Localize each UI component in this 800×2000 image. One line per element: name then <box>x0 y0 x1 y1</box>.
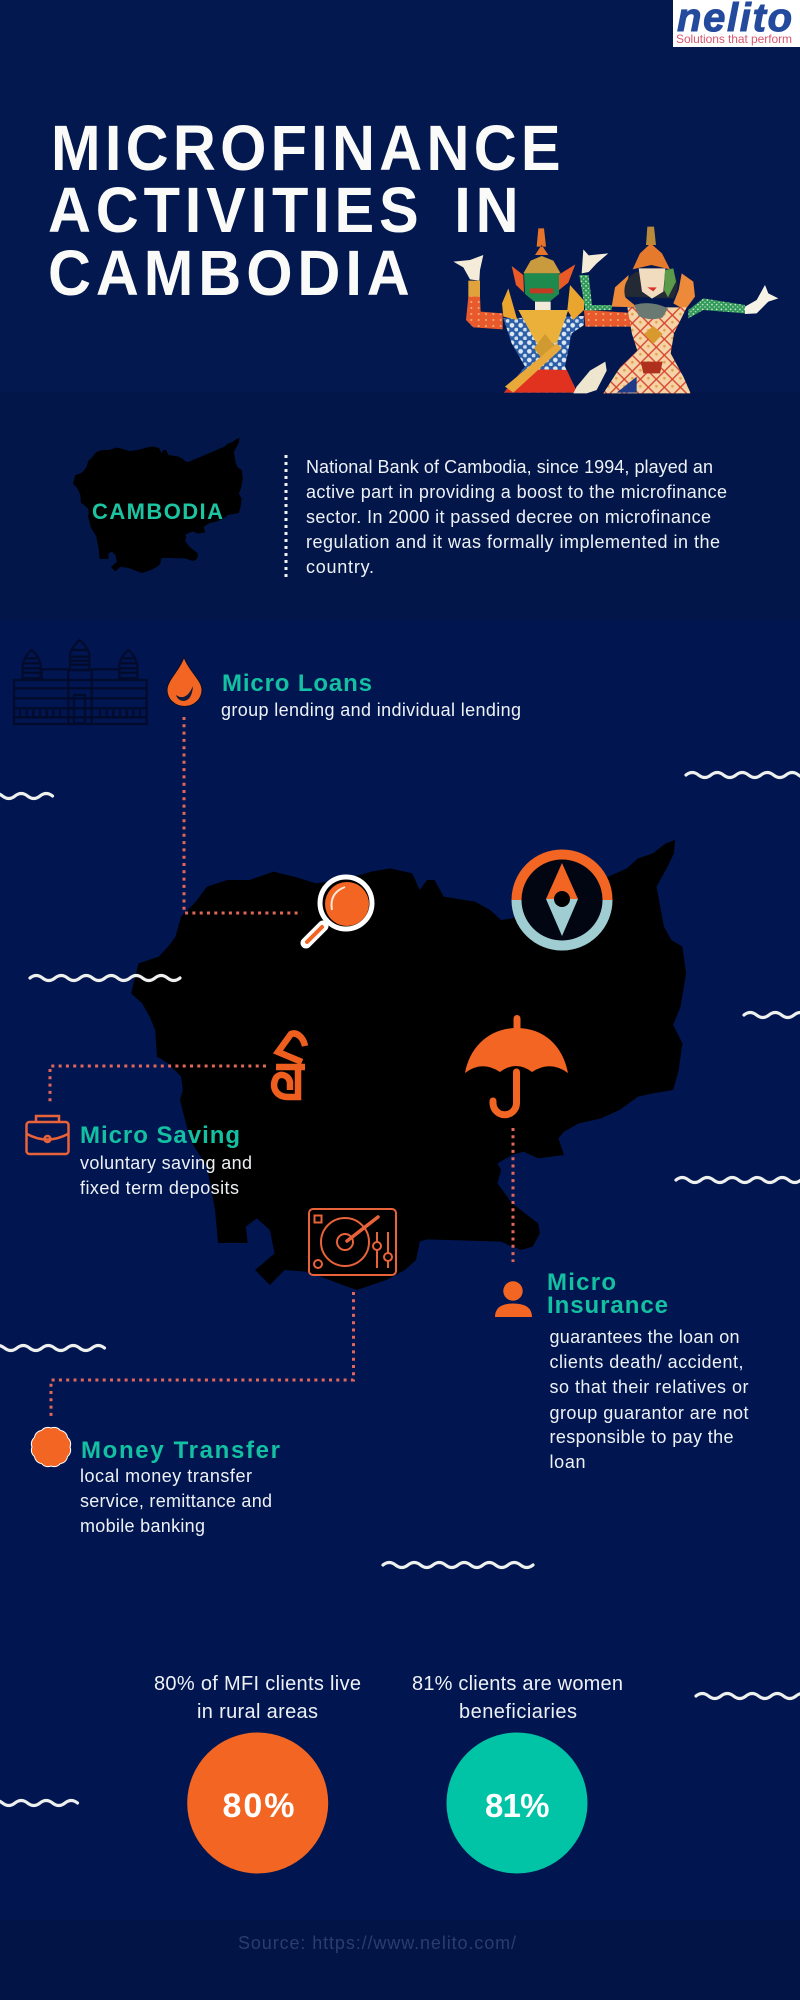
icon: riel symbol <box>274 1034 305 1097</box>
Micro Loans text: group lending and individual lending <box>221 700 521 720</box>
Micro Insurance text: guarantees the loan on <box>550 1327 740 1347</box>
icon: compass <box>516 854 608 946</box>
Micro Saving text: Micro Saving <box>80 1122 240 1149</box>
connector: Micro Insurance <box>512 1128 514 1262</box>
title <box>48 113 561 309</box>
label: CAMBODIA: CAMBODIA <box>92 499 223 524</box>
icon: badge <box>31 1427 71 1467</box>
raised arm and hand <box>579 249 612 311</box>
Money Transfer text: mobile banking <box>80 1516 205 1536</box>
intro text block: regulation and it was formally implemented in the <box>306 532 720 552</box>
dancer woman <box>573 227 778 393</box>
Micro Insurance text: clients death/ accident, <box>550 1352 744 1372</box>
Micro Insurance text: responsible to pay the <box>550 1427 734 1447</box>
title: ACTIVITIES IN <box>48 175 519 246</box>
intro text block <box>306 457 727 577</box>
stat: 80 percent <box>154 1673 361 1874</box>
connector: Money Transfer <box>51 1292 354 1419</box>
stat: 80 percent: 80% of MFI clients live <box>154 1673 361 1695</box>
stat: 81 percent: beneficiaries <box>459 1701 577 1723</box>
icon: magnifier <box>306 877 372 943</box>
source line: Source: https://www.nelito.com/ <box>238 1933 516 1953</box>
connector: Micro Saving <box>50 1066 266 1105</box>
background: footer band <box>0 1920 800 2000</box>
Micro Saving text: voluntary saving and <box>80 1153 252 1173</box>
background: intro band <box>0 392 800 620</box>
intro text block: country. <box>306 557 374 577</box>
Micro Insurance text <box>547 1269 748 1472</box>
wave over map <box>30 976 180 980</box>
intro text block: active part in providing a boost to the microfinance <box>306 482 727 502</box>
Micro Loans text <box>221 670 521 720</box>
map: large Cambodia <box>131 840 686 1290</box>
demon dancer <box>453 228 646 393</box>
background: top header <box>0 0 800 392</box>
Micro Insurance text: group guarantor are not <box>550 1403 748 1423</box>
divider: dotted white vertical <box>284 455 288 578</box>
Money Transfer text: service, remittance and <box>80 1491 272 1511</box>
waves <box>0 772 800 1806</box>
icon: person <box>495 1281 532 1317</box>
map: small Cambodia <box>73 438 243 573</box>
intro text block: sector. In 2000 it passed decree on microfinance <box>306 507 711 527</box>
Micro Loans text: Micro Loans <box>222 670 372 697</box>
icon: briefcase <box>26 1116 68 1154</box>
Money Transfer text: local money transfer <box>80 1466 252 1486</box>
Micro Insurance text: so that their relatives or <box>550 1377 748 1397</box>
stat: 81 percent: 81% <box>485 1787 550 1824</box>
icon: turntable <box>309 1209 396 1275</box>
Money Transfer text: Money Transfer <box>81 1437 280 1464</box>
intro text block: National Bank of Cambodia, since 1994, played an <box>306 457 713 477</box>
decorative building icon: Angkor Wat <box>14 640 147 724</box>
stat: 81 percent <box>412 1673 623 1874</box>
Micro Saving text: fixed term deposits <box>80 1178 239 1198</box>
Money Transfer text <box>80 1437 280 1536</box>
title: CAMBODIA <box>48 238 410 309</box>
stat: 81 percent: 81% clients are women <box>412 1673 623 1695</box>
connector: Micro Loans <box>184 717 302 913</box>
stat: 80 percent: in rural areas <box>197 1701 318 1723</box>
Micro Insurance text: Micro <box>547 1269 616 1296</box>
logo: nelito: Solutions that perform <box>676 32 792 46</box>
icon: umbrella <box>465 1015 568 1115</box>
background: main section <box>0 620 800 1920</box>
illustration: Cambodian dancers <box>453 227 778 393</box>
Micro Insurance text: Insurance <box>547 1292 668 1319</box>
stat: 80 percent: 80% <box>222 1787 294 1825</box>
title: MICROFINANCE <box>51 113 561 184</box>
Micro Saving text <box>80 1122 252 1198</box>
icon: drop <box>167 657 202 707</box>
Micro Insurance text: loan <box>550 1452 586 1472</box>
